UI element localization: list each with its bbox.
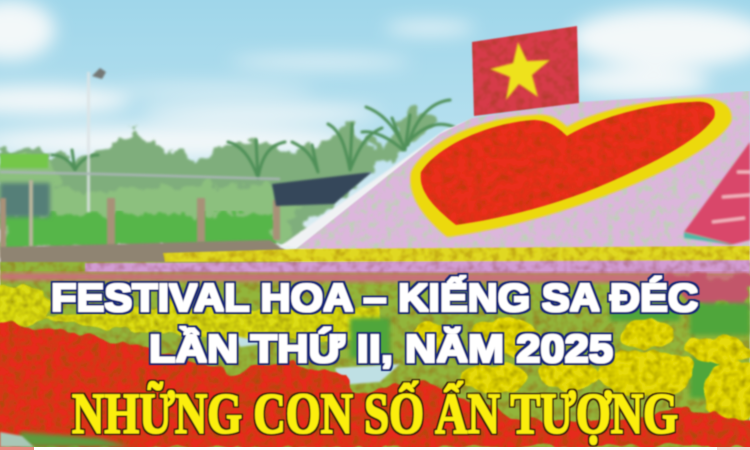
red heart fill [421, 102, 715, 225]
flower field foreground [0, 246, 750, 450]
flag made of flowers [472, 26, 579, 116]
pink flower strip [85, 260, 750, 274]
yellow flower mounds left [0, 283, 380, 345]
heart of flowers [410, 98, 732, 237]
dark tarp on fence [272, 172, 372, 206]
green shrubs [350, 303, 750, 398]
green foliage at lower left [20, 432, 130, 447]
title line one: FESTIVAL HOA – KIẾNG SA ĐÉC [51, 276, 698, 320]
decorative banner sign [684, 142, 750, 245]
pale corner [0, 432, 34, 447]
yellow flower mounds right [406, 318, 750, 424]
bottom white strip [0, 447, 750, 450]
light pole [87, 68, 106, 212]
pink and red flower row [0, 273, 750, 283]
sky with clouds [0, 0, 750, 250]
white slope edge [279, 118, 480, 248]
yellow hedge [163, 246, 750, 262]
flower hillside [296, 91, 750, 250]
yellow star [490, 42, 550, 100]
title line two: LẦN THỨ II, NĂM 2025 [149, 327, 613, 371]
yellow heart border [410, 98, 732, 237]
trees and palms behind the fence [0, 108, 440, 250]
palm fronds [52, 100, 456, 178]
red flower mounds [0, 322, 750, 447]
fence [0, 172, 280, 258]
water reflection [235, 336, 400, 385]
brown wall at the base [0, 240, 290, 270]
